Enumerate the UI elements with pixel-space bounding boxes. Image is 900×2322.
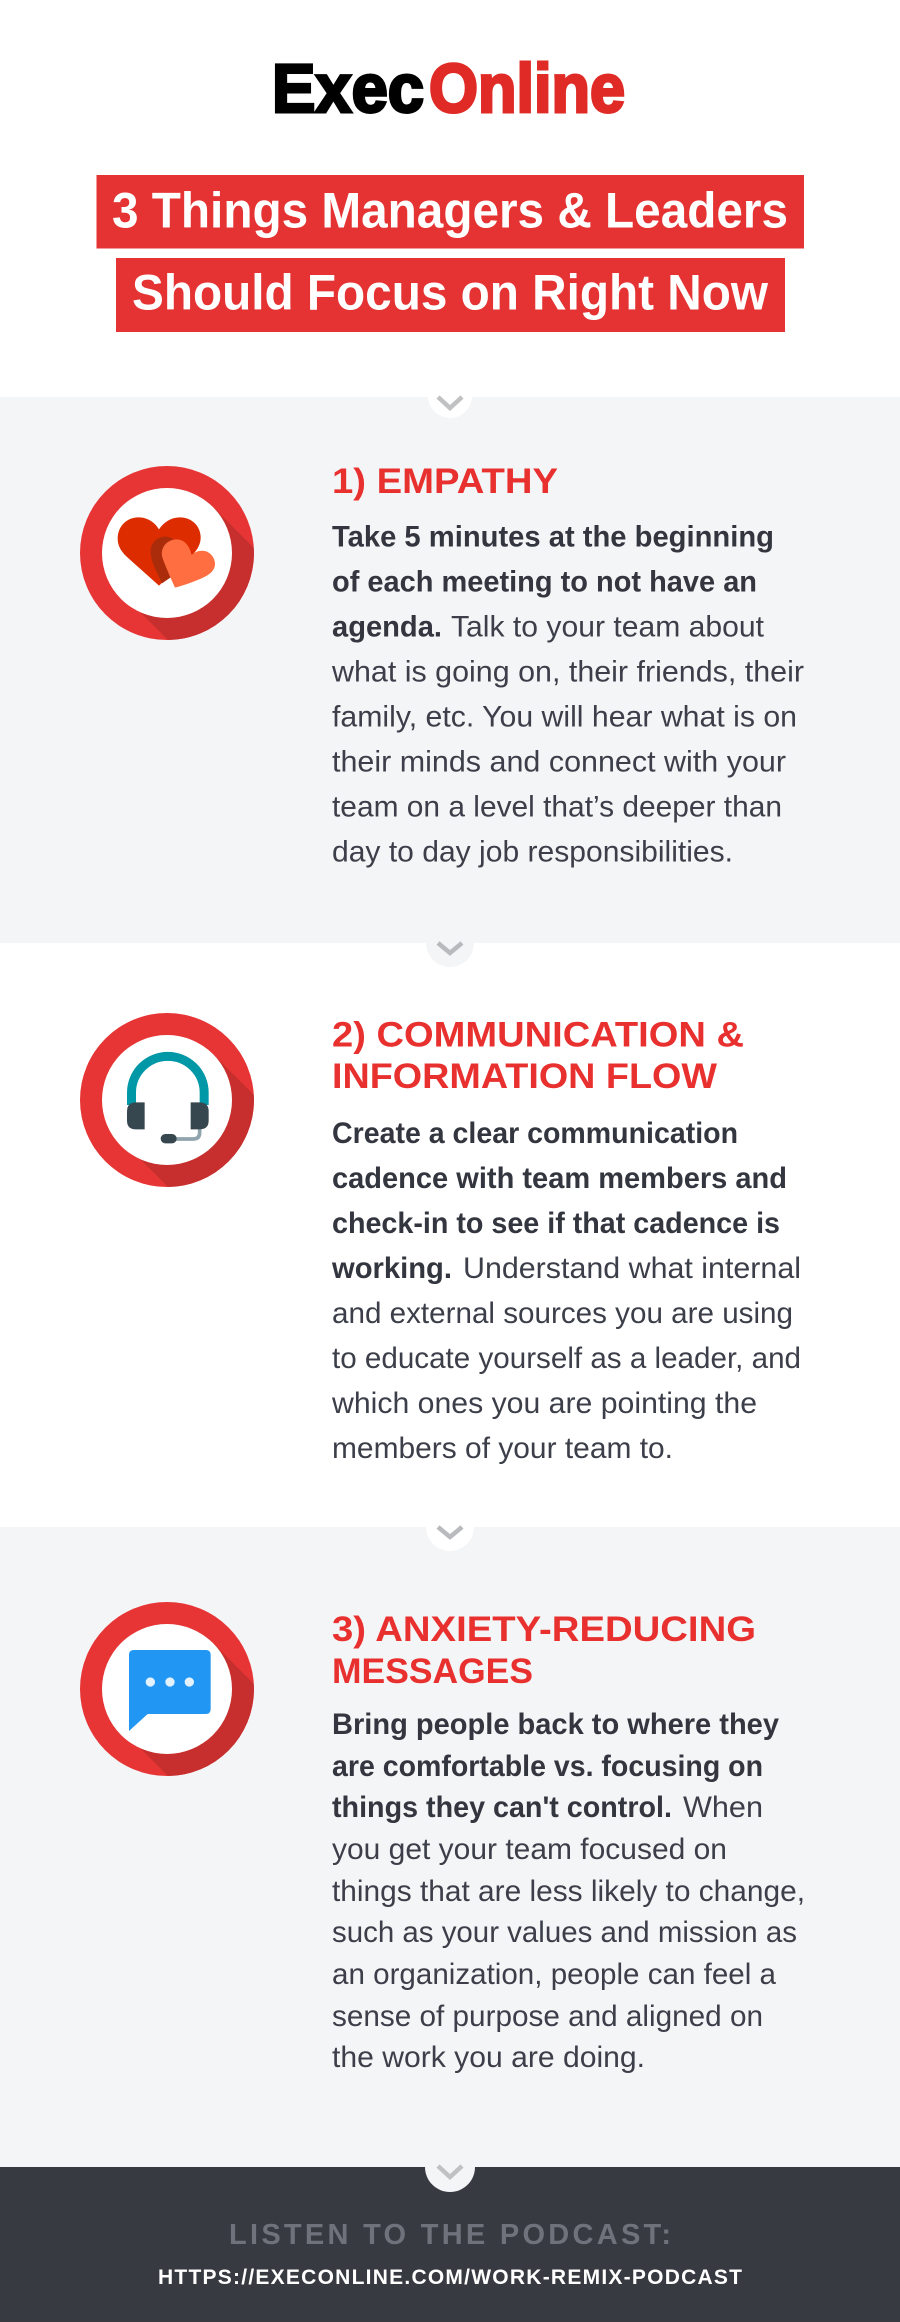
heading: communication: 2) COMMUNICATION & — [332, 1016, 744, 1055]
logo: ExecOnline — [272, 50, 625, 127]
heading: empathy: 1) EMPATHY — [332, 462, 558, 501]
arrow: to footer — [425, 2142, 475, 2192]
text block: communication: check-in to see if that cadence is — [332, 1207, 780, 1240]
logo: ExecOnline: Online — [429, 50, 625, 127]
text block: anxiety-reducing messages: you get your team focused on — [332, 1833, 727, 1866]
arrow: to section 3 — [426, 1503, 474, 1551]
text block: anxiety-reducing messages: an organization, people can feel a — [332, 1958, 777, 1991]
text block: communication: Create a clear communication — [332, 1117, 738, 1150]
heading: anxiety-reducing messages: 3) ANXIETY-REDUCING — [332, 1610, 756, 1649]
panel: empathy — [0, 397, 900, 943]
text block: anxiety-reducing messages: sense of purpose and aligned on — [332, 2000, 763, 2033]
text block: empathy: day to day job responsibilities. — [332, 836, 733, 869]
text block: empathy: of each meeting to not have an — [332, 566, 757, 599]
footer label: LISTEN TO THE PODCAST: — [229, 2219, 671, 2251]
text block: communication: to educate yourself as a leader, and — [332, 1342, 801, 1375]
text block: empathy: their minds and connect with your — [332, 746, 786, 779]
icon: hearts — [80, 466, 254, 640]
panel: anxiety-reducing messages — [0, 1527, 900, 2167]
panel: footer — [0, 2167, 900, 2322]
heading: anxiety-reducing messages: MESSAGES — [332, 1652, 533, 1691]
text block: communication: working. — [331, 1252, 452, 1285]
text block: communication: Understand what internal — [463, 1252, 801, 1285]
text block: anxiety-reducing messages: the work you are doing. — [332, 2041, 645, 2074]
text block: communication: and external sources you are using — [332, 1297, 793, 1330]
arrow: to section 1 — [428, 374, 472, 418]
text block: empathy: what is going on, their friends, their — [331, 656, 804, 689]
text block: communication: cadence with team members and — [332, 1162, 787, 1195]
text block: empathy: agenda. — [332, 611, 442, 644]
text block: anxiety-reducing messages: Bring people back to where they — [332, 1708, 780, 1741]
title: Should Focus on Right Now — [132, 264, 768, 320]
text block: empathy: family, etc. You will hear what is on — [332, 701, 797, 734]
title — [96, 175, 804, 332]
heading: anxiety-reducing messages — [332, 1610, 756, 1691]
heading: communication: INFORMATION FLOW — [332, 1057, 717, 1096]
text block: empathy: Talk to your team about — [451, 611, 764, 644]
title: 3 Things Managers & Leaders — [112, 182, 788, 238]
text block: anxiety-reducing messages: things they can't control. — [332, 1791, 672, 1824]
text block: empathy — [331, 521, 804, 869]
icon: chat bubble — [80, 1602, 254, 1776]
text block: empathy: team on a level that’s deeper than — [332, 791, 782, 824]
text block: anxiety-reducing messages: are comfortable vs. focusing on — [332, 1750, 763, 1783]
text block: anxiety-reducing messages: When — [683, 1791, 763, 1824]
text block: communication: members of your team to. — [332, 1432, 673, 1465]
text block: communication: which ones you are pointing the — [331, 1387, 757, 1420]
heading: communication — [332, 1016, 744, 1096]
text block: anxiety-reducing messages — [332, 1708, 805, 2074]
text block: anxiety-reducing messages: such as your values and mission as — [332, 1916, 797, 1949]
text block: empathy: Take 5 minutes at the beginning — [332, 521, 774, 554]
logo: ExecOnline: Exec — [272, 50, 424, 127]
text block: anxiety-reducing messages: things that are less likely to change, — [332, 1875, 805, 1908]
arrow: to section 2 — [426, 919, 474, 967]
panel: communication — [80, 1013, 800, 1464]
footer url: HTTPS://EXECONLINE.COM/WORK-REMIX-PODCAST — [158, 2266, 742, 2289]
icon: headset — [80, 1013, 254, 1187]
text block: communication — [331, 1117, 801, 1465]
